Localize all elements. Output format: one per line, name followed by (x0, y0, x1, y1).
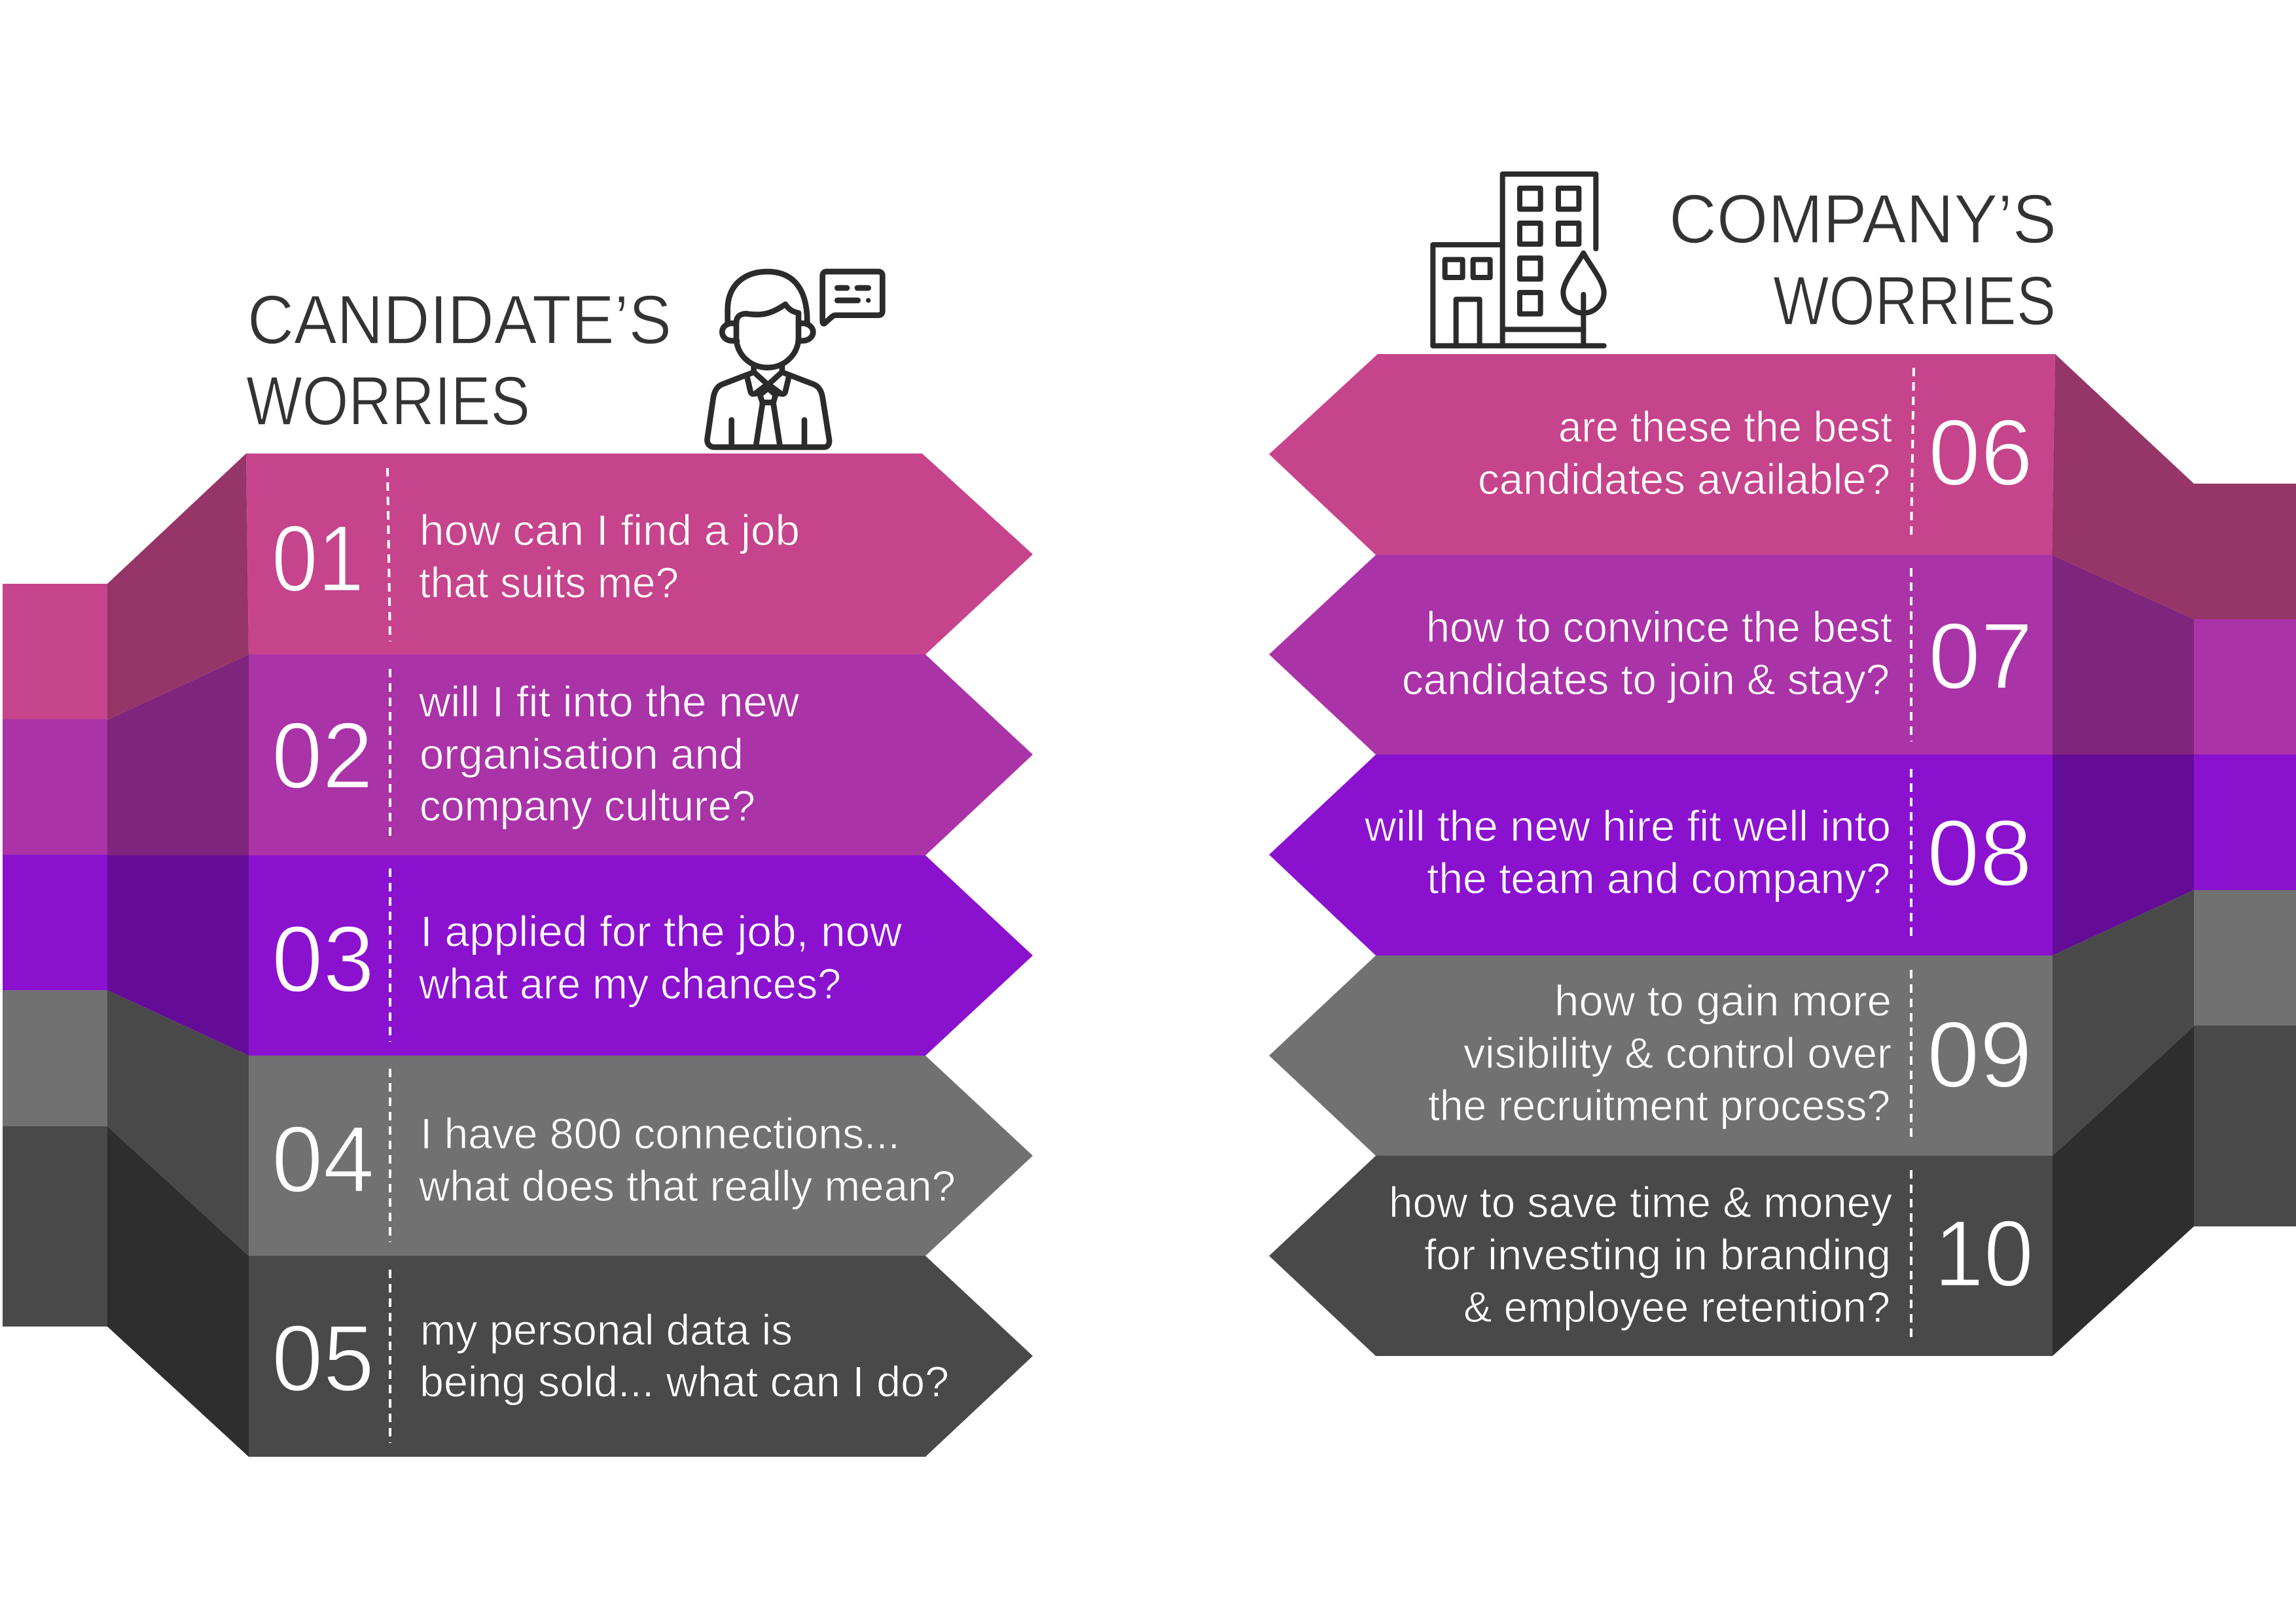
item 03: 03 (272, 906, 374, 1012)
item 07: how to convince the best (1426, 603, 1892, 651)
item 03: what are my chances? (418, 959, 841, 1008)
item 09: how to gain more (1554, 976, 1892, 1025)
item 05: being sold... what can I do? (420, 1357, 949, 1406)
item 06: 06 (1928, 400, 2033, 505)
item 01: 01 (272, 506, 364, 611)
item 05 (3, 1126, 1033, 1457)
heading: company's worries (1669, 181, 2056, 340)
item 09: visibility & control over (1463, 1029, 1892, 1077)
icon: candidate with speech bubble (707, 272, 882, 447)
icon: office buildings and tree (1433, 174, 1604, 346)
item 08: the team and company? (1427, 854, 1890, 902)
item 10: 10 (1934, 1201, 2034, 1306)
panel: company's worries (1269, 354, 2296, 1356)
item 08 (1269, 755, 2296, 955)
item 09: the recruitment process? (1428, 1081, 1890, 1130)
item 08: will the new hire fit well into (1364, 802, 1891, 850)
item 03 (3, 855, 1033, 1056)
heading: company's worries: WORRIES (1773, 262, 2056, 340)
item 04 (3, 990, 1033, 1256)
item 01 (3, 454, 1033, 720)
item 10: how to save time & money (1389, 1178, 1892, 1226)
item 01: that suits me? (419, 558, 679, 607)
item 02: will I fit into the new (418, 677, 799, 726)
item 08: 08 (1927, 800, 2032, 906)
item 06: candidates available? (1478, 455, 1890, 503)
item 02: company culture? (420, 781, 755, 830)
item 02: 02 (272, 703, 373, 808)
item 10 (1269, 1026, 2296, 1356)
item 09: 09 (1927, 1002, 2032, 1107)
heading: company's worries: COMPANY’S (1669, 181, 2056, 258)
item 07 (1269, 555, 2296, 755)
item 03: I applied for the job, now (420, 907, 902, 955)
heading: candidate's worries: WORRIES (246, 363, 530, 440)
item 06 (1269, 354, 2296, 620)
item 10: & employee retention? (1463, 1283, 1890, 1331)
heading: candidate's worries: CANDIDATE’S (247, 281, 672, 359)
item 02 (3, 654, 1033, 855)
item 09 (1269, 890, 2296, 1156)
item 10: for investing in branding (1424, 1230, 1891, 1279)
item 01: how can I find a job (420, 506, 800, 554)
item 04: I have 800 connections... (420, 1109, 900, 1158)
item 07: 07 (1928, 603, 2033, 709)
item 04: 04 (272, 1107, 374, 1212)
item 05: my personal data is (420, 1306, 793, 1354)
item 06: are these the best (1558, 402, 1892, 451)
item 04: what does that really mean? (418, 1162, 956, 1210)
heading: candidate's worries (246, 281, 672, 440)
item 07: candidates to join & stay? (1402, 655, 1890, 704)
panel: candidate's worries (3, 454, 1033, 1457)
item 02: organisation and (420, 730, 744, 778)
item 05: 05 (272, 1306, 374, 1411)
